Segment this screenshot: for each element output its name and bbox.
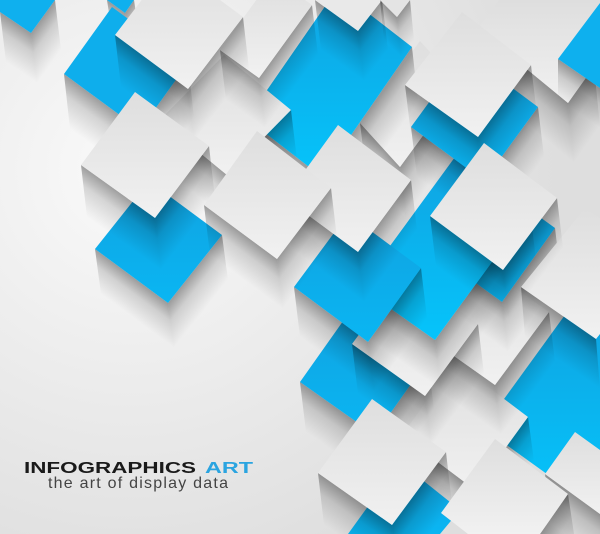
tile: white left <box>81 92 215 270</box>
tile: white bottom centre <box>318 399 452 534</box>
tile: white bottom right corner <box>545 432 600 534</box>
tile: blue centre <box>294 214 427 392</box>
title: ART <box>205 460 254 477</box>
title <box>24 460 254 477</box>
tile: blue top left <box>0 0 61 83</box>
tile: white bottom right <box>441 439 574 534</box>
tile: white right small back <box>420 259 555 435</box>
tile: white centre <box>285 125 417 302</box>
tile: blue left <box>95 181 228 348</box>
tile: white top left <box>115 0 249 141</box>
tile: white centre left <box>204 131 337 309</box>
tile: white centre lower <box>352 272 484 446</box>
tile: small blue top second <box>150 0 189 55</box>
tile: white lower centre back <box>402 362 534 534</box>
tile: white top back <box>220 0 318 128</box>
tile: blue lower right <box>483 308 600 500</box>
tile: white centre left back <box>160 55 297 225</box>
tile: blue behind right <box>430 176 561 352</box>
tile: small blue top <box>107 0 140 53</box>
tile: blue upper left <box>64 7 194 185</box>
tile: blue top right corner <box>558 3 600 128</box>
tile: bright blue centre <box>360 157 536 390</box>
tile: blue bottom <box>348 462 460 534</box>
title: INFOGRAPHICS <box>24 460 196 477</box>
tile: white centre right <box>430 143 563 320</box>
tile: small white top <box>315 0 388 81</box>
tile: blue lower centre <box>300 307 434 485</box>
tile: big blue upper centre <box>247 0 418 232</box>
tile: white behind big blue <box>360 41 466 217</box>
tile: white top right back <box>478 0 600 163</box>
subtitle: the art of display data <box>48 475 228 492</box>
tile: small white top second <box>380 0 414 57</box>
tile: blue behind top right <box>411 53 544 231</box>
tile: white right edge <box>521 208 600 389</box>
tile: white top right <box>405 12 537 187</box>
